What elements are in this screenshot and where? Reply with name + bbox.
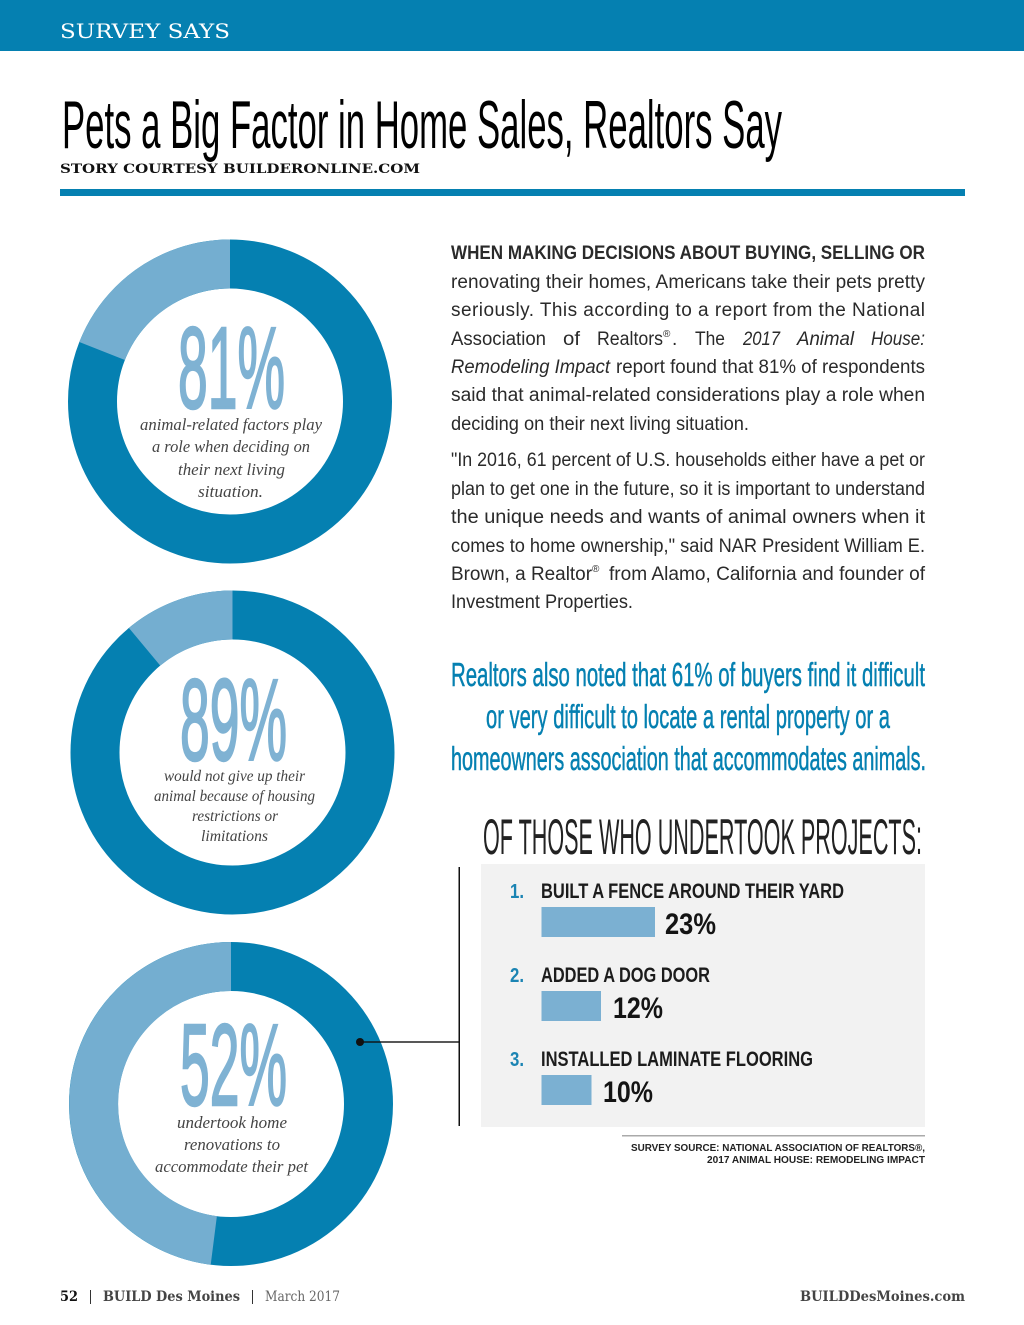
article text: the unique needs and wants of animal owners when it [451, 507, 926, 528]
article text: seriously. This according to a report from the National [451, 300, 925, 321]
article text: . [672, 329, 677, 350]
article text: Remodeling Impact [451, 357, 611, 378]
survey source [622, 1135, 926, 1166]
footer: March 2017 [265, 1289, 340, 1305]
bar item 2 [510, 964, 710, 1025]
article text: ® [592, 564, 600, 575]
article text [451, 243, 926, 613]
footer: BUILDDesMoines.com [800, 1289, 965, 1305]
connector line from donut to panel [356, 867, 460, 1126]
footer [60, 1289, 965, 1305]
donut chart: 81%: their next living [178, 460, 285, 479]
article text: Association [451, 329, 546, 350]
donut chart: 89%: animal because of housing [154, 788, 315, 805]
article text: The [695, 329, 725, 350]
article text: House: [871, 329, 925, 350]
pull quote [451, 656, 926, 777]
article text: plan to get one in the future, so it is important to understand [451, 479, 925, 500]
donut chart: 89%: would not give up their [164, 768, 306, 785]
bar item 2: 2. [510, 965, 524, 987]
donut chart: 52%: undertook home [177, 1113, 287, 1132]
donut chart: 52% [94, 966, 368, 1242]
donut chart: 81%: a role when deciding on [152, 437, 310, 456]
bar item 1: 23% [665, 908, 716, 941]
donut chart: 52%: accommodate their pet [155, 1157, 309, 1176]
article text: Animal [796, 329, 855, 350]
article text: from Alamo, California and founder of [609, 564, 926, 585]
article text: WHEN MAKING DECISIONS ABOUT BUYING, SELLING OR [451, 243, 925, 264]
panel: project bar chart [481, 864, 925, 1127]
bar item 1: BUILT A FENCE AROUND THEIR YARD [541, 880, 844, 903]
byline: STORY COURTESY BUILDERONLINE.COM [60, 162, 420, 177]
donut chart: 89%: limitations [201, 828, 268, 845]
donut chart: 81% [92, 264, 368, 539]
bar item 3: 3. [510, 1049, 524, 1071]
bar item 2: 12% [613, 992, 663, 1025]
survey source: SURVEY SOURCE: NATIONAL ASSOCIATION OF REALTORS®, [631, 1142, 925, 1154]
footer: 52 [60, 1289, 78, 1305]
donut chart: 89% [95, 615, 370, 890]
article text: renovating their homes, Americans take their pets pretty [451, 272, 926, 293]
donut chart: 89%: 89% [180, 655, 287, 785]
bar item 3: 10% [603, 1076, 653, 1109]
bar item 2: ADDED A DOG DOOR [541, 964, 710, 987]
article text: deciding on their next living situation. [451, 414, 749, 435]
header band: SURVEY SAYS [60, 19, 230, 43]
article text: 2017 [742, 329, 781, 350]
footer: BUILD Des Moines [103, 1289, 240, 1305]
donut chart: 52%: renovations to [184, 1135, 280, 1154]
article text: ® [663, 329, 671, 340]
article text: "In 2016, 61 percent of U.S. households either have a pet or [451, 450, 926, 471]
donut chart: 81%: 81% [178, 303, 285, 433]
article text: of [563, 329, 581, 350]
bar item 1 [510, 880, 844, 941]
article text: Brown, a Realtor [451, 564, 593, 585]
donut chart: 52%: 52% [180, 1000, 287, 1130]
article text: Investment Properties. [451, 592, 633, 613]
donut chart: 81%: situation. [198, 482, 263, 501]
donut chart: 89%: restrictions or [192, 808, 279, 825]
bar item 3: INSTALLED LAMINATE FLOORING [541, 1048, 813, 1071]
article text: comes to home ownership," said NAR President William E. [451, 536, 925, 557]
article text: report found that 81% of respondents [616, 357, 925, 378]
header band [0, 0, 1024, 51]
survey source: 2017 ANIMAL HOUSE: REMODELING IMPACT [707, 1154, 926, 1166]
bar item 1: 1. [510, 881, 524, 903]
donut chart: 81%: animal-related factors play [140, 415, 322, 434]
article text: Realtors [597, 329, 663, 350]
article text: said that animal-related considerations play a role when [451, 385, 925, 406]
bar item 3 [510, 1048, 813, 1109]
